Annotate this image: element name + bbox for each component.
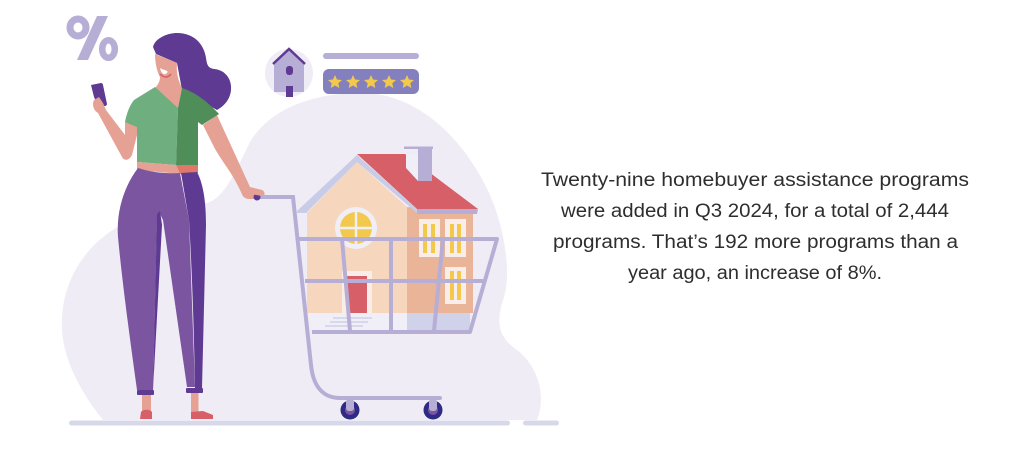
side windows <box>419 219 466 304</box>
hand fingers <box>248 189 264 196</box>
text block: programs. That’s 192 more programs than a <box>553 232 958 253</box>
house rating badge <box>265 49 419 97</box>
handle grip <box>254 194 260 200</box>
eave <box>417 209 478 214</box>
roof <box>357 154 478 209</box>
house front wall <box>307 162 407 313</box>
left arm and hand <box>93 97 137 160</box>
cart wheels <box>340 399 442 420</box>
house side wall <box>407 207 473 313</box>
icon: percent sign <box>70 16 115 60</box>
shirt light side <box>125 87 178 165</box>
front steps <box>325 318 372 326</box>
midriff <box>137 162 180 174</box>
hair <box>153 33 231 110</box>
ground line <box>69 420 559 426</box>
house <box>297 146 478 330</box>
cart frame <box>257 197 497 398</box>
phone <box>91 83 107 106</box>
round window <box>335 207 377 249</box>
text block: Twenty-nine homebuyer assistance programs <box>541 170 969 191</box>
door <box>342 271 372 313</box>
chimney <box>404 146 433 181</box>
rating line <box>323 53 419 59</box>
shirt dark side <box>176 88 219 165</box>
shoes <box>140 410 213 419</box>
woman with phone <box>91 33 265 419</box>
shopping cart <box>248 189 497 420</box>
house base <box>307 313 470 330</box>
smile and collar <box>160 68 171 77</box>
gable trim <box>297 155 417 213</box>
right arm and hand <box>203 115 265 199</box>
icon: house in circle <box>265 49 313 97</box>
waistband shadow <box>176 165 198 174</box>
text block: year ago, an increase of 8%. <box>628 263 882 284</box>
trousers dark <box>153 172 206 390</box>
face and neck <box>155 54 182 108</box>
ankles <box>142 393 198 412</box>
star rating <box>323 69 419 94</box>
background blob <box>62 93 541 420</box>
trouser cuffs <box>137 388 203 395</box>
text block <box>541 170 969 284</box>
text block: were added in Q3 2024, for a total of 2,444 <box>560 201 949 222</box>
trousers light <box>118 168 195 390</box>
